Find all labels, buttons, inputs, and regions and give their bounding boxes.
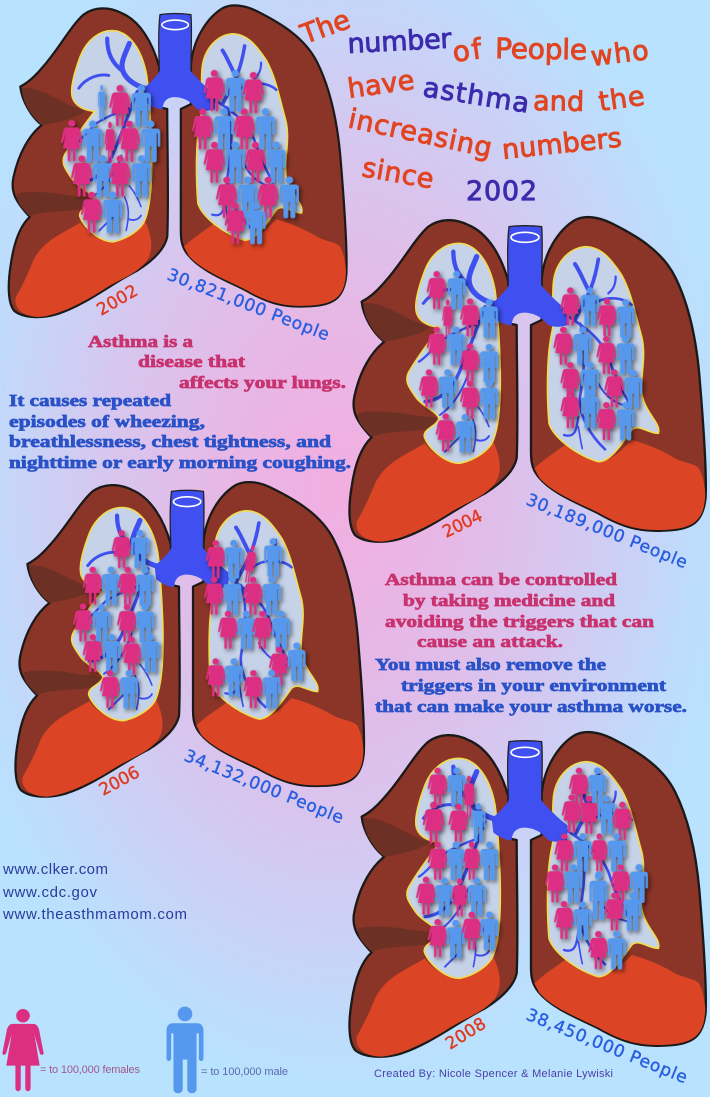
text block: controlling asthma: Asthma can be controlled [385,570,618,589]
title: 2002 [466,176,537,207]
title: increasing [346,104,495,164]
year label 2004: 2004 [439,506,486,542]
source links [2,861,187,923]
count label 2008: 38,450,000 People [523,1005,690,1088]
lungs: 2004 [349,217,706,573]
lungs: 2008 [349,732,706,1088]
text block: controlling asthma: triggers in your environment [401,676,666,695]
count label 2006: 34,132,000 People [181,746,346,828]
text block: asthma definition: breathlessness, chest tightness, and [9,432,332,451]
text block: asthma definition: nighttime or early morning coughing. [9,453,351,472]
legend: female text: = to 100,000 females [40,1064,140,1076]
lung anatomy 2004 [349,217,706,542]
people icons 2004 [419,271,642,453]
title: since [360,152,436,195]
title: People [495,32,587,67]
title [296,4,650,207]
text block: asthma definition: affects your lungs. [179,373,346,392]
text block: controlling asthma [375,570,687,716]
title: of [450,32,485,69]
legend: male text: = to 100,000 male [201,1066,288,1078]
lung anatomy 2008 [349,732,706,1057]
lung anatomy 2006 [15,482,364,797]
text block: asthma definition: episodes of wheezing, [9,412,205,431]
credits: Created By: Nicole Spencer & Melanie Lywiski [374,1068,613,1080]
legend: male icon [167,1007,203,1093]
title: asthma [421,72,531,120]
source links: www.cdc.gov [2,884,98,901]
title: numbers [500,123,623,166]
count label 2002: 30,821,000 People [164,265,332,345]
lungs: 2002 [9,5,347,345]
year label 2006: 2006 [96,763,143,800]
title: and [533,86,584,118]
people icons 2006 [73,530,305,709]
count label 2004: 30,189,000 People [523,490,690,573]
source links: www.theasthmamom.com [2,906,187,923]
text block: controlling asthma: avoiding the triggers that can [385,612,655,631]
lung anatomy 2002 [9,5,347,317]
text block: asthma definition: It causes repeated [9,391,172,410]
text block: controlling asthma: cause an attack. [417,632,563,651]
text block: controlling asthma: You must also remove the [375,655,607,674]
source links: www.clker.com [2,861,108,878]
text block: controlling asthma: by taking medicine and [403,591,616,610]
title: who [589,35,650,73]
lungs: 2006 [15,482,364,828]
people icons 2002 [61,70,299,244]
text block: asthma definition: disease that [138,352,245,371]
year label 2002: 2002 [94,281,142,320]
people icons 2008 [416,767,648,970]
legend: female icon [2,1009,44,1091]
title: have [346,65,416,105]
text block: asthma definition [9,332,351,472]
title: the [597,81,647,118]
year label 2008: 2008 [442,1014,490,1054]
title: number [347,24,453,60]
text block: controlling asthma: that can make your asthma worse. [375,697,687,716]
title: The [296,4,354,51]
text block: asthma definition: Asthma is a [88,332,194,351]
